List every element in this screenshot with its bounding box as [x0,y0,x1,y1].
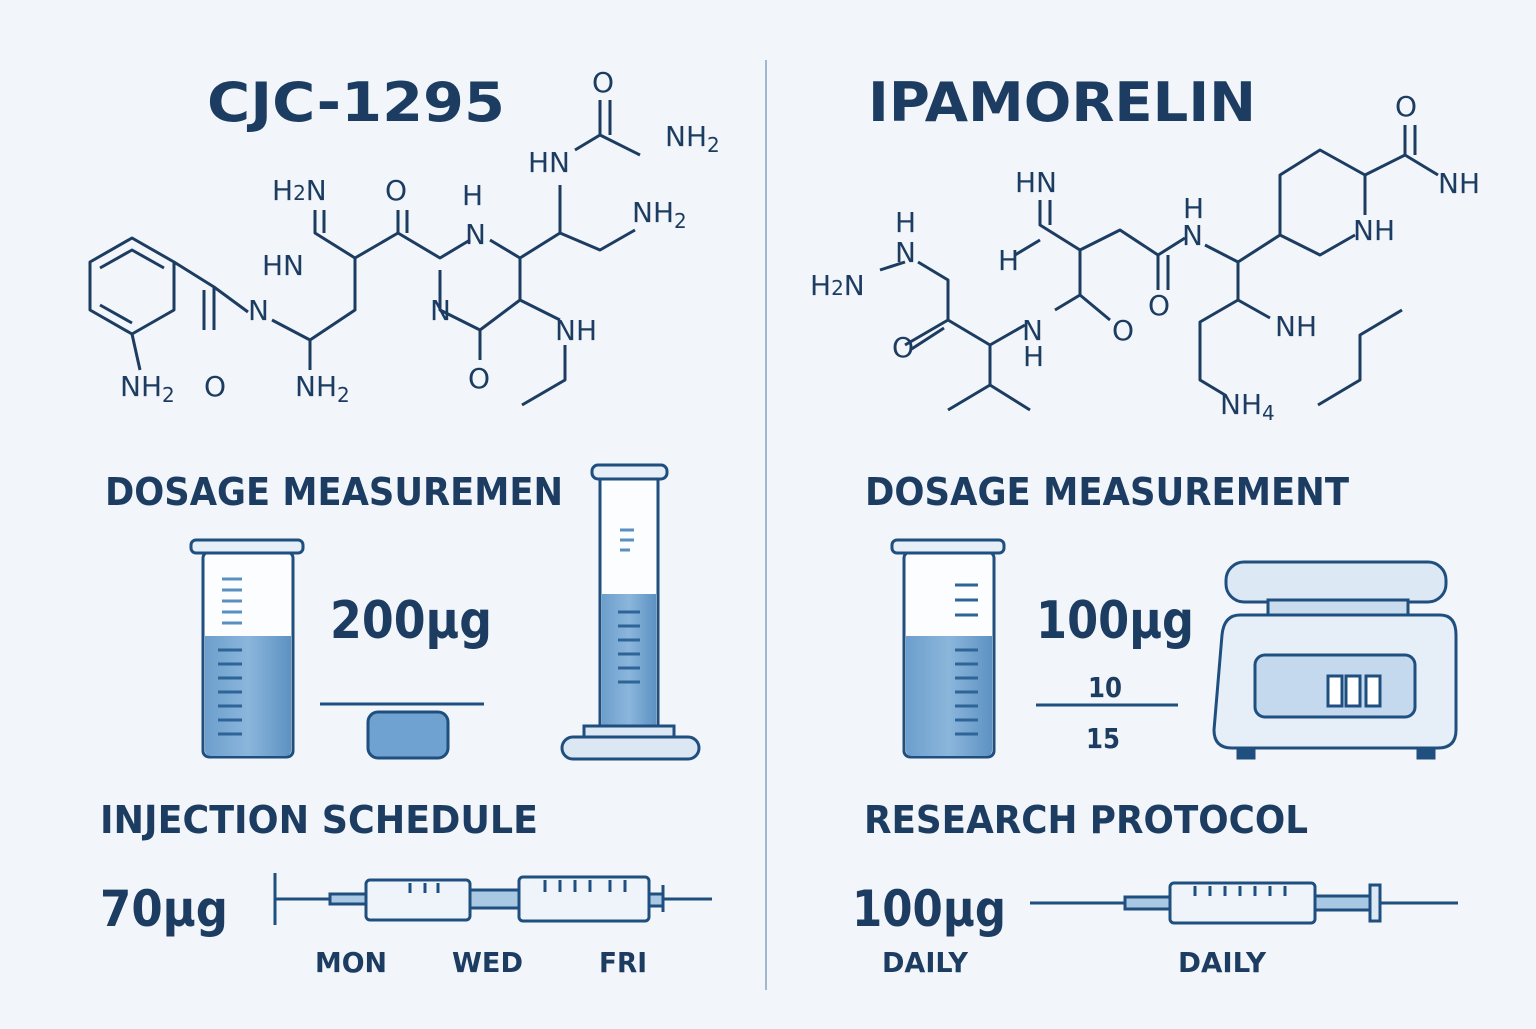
value: 200 µg: 200μg [330,591,492,651]
molecule labels: Ipamorelin: 4 [1262,401,1275,425]
molecule labels: Ipamorelin: NH [1220,388,1262,421]
labels: days [315,946,647,979]
molecule labels: CJC: N [248,294,269,327]
molecule labels: CJC: O [468,362,490,395]
molecule labels: Ipamorelin: H [895,206,916,239]
value: 100 µg: 100μg [1036,591,1194,651]
molecule labels: Ipamorelin: NH [1353,214,1395,247]
molecule labels: Ipamorelin: HN [1015,166,1057,199]
molecule labels: Ipamorelin: H [1183,192,1204,225]
heading: dosage measurement Ipamorelin: DOSAGE MEASUREMENT [865,470,1349,514]
molecule labels: CJC: O [204,370,226,403]
molecule labels: Ipamorelin: O [1148,289,1170,322]
molecule labels: CJC: H [462,179,483,212]
molecule labels: Ipamorelin: N [1022,314,1043,347]
molecule labels: CJC: NH [295,370,337,403]
value: 100 µg daily: 100μg [852,880,1006,938]
molecule labels: CJC: 2 [707,133,720,157]
molecule labels: CJC: O [592,66,614,99]
labels: daily: DAILY [882,946,969,979]
labels: daily: DAILY [1178,946,1267,979]
icon: syringe CJC [275,873,712,925]
value: 70 µg: 70μg [100,880,228,938]
heading: injection schedule: INJECTION SCHEDULE [100,798,538,842]
title: IPAMORELIN: IPAMORELIN [868,71,1256,134]
heading: dosage measurement CJC: DOSAGE MEASUREMEN [105,470,563,514]
icon: beaker right [892,540,1004,757]
molecule labels: Ipamorelin: O [892,331,914,364]
molecule labels: CJC: HN [528,146,570,179]
molecule labels: CJC: NH [665,120,707,153]
molecule labels: CJC: NH [555,314,597,347]
molecule labels: CJC: HN [262,249,304,282]
molecule labels: CJC: N [465,218,486,251]
icon: graduated cylinder [562,465,699,759]
fraction 10/15 [1036,671,1178,755]
molecule labels: CJC: NH [120,370,162,403]
fraction 10/15: 15 [1086,722,1120,755]
title: CJC-1295: CJC-1295 [207,71,505,134]
molecule labels: Ipamorelin: N [1182,219,1203,252]
molecule labels: CJC: 2 [674,209,687,233]
fraction 10/15: 10 [1088,671,1122,704]
molecule labels: Ipamorelin [810,90,1480,425]
molecule labels: Ipamorelin: NH [1438,167,1480,200]
molecule labels: CJC: NH [632,196,674,229]
icon: beaker left [191,540,303,757]
icon: scale [1214,562,1456,758]
labels: days: FRI [599,946,647,979]
molecule labels: CJC: O [385,174,407,207]
molecule labels: CJC: N [430,294,451,327]
labels: daily [882,946,1267,979]
molecule: Ipamorelin [880,125,1438,410]
molecule labels: Ipamorelin: N [895,236,916,269]
molecule labels: Ipamorelin: O [1395,90,1417,123]
molecule labels: Ipamorelin: O [1112,314,1134,347]
icon: syringe Ipamorelin [1030,883,1458,923]
molecule: CJC-1295 [90,100,640,405]
molecule labels: CJC: 2 [337,383,350,407]
molecule labels: Ipamorelin: H [998,244,1019,277]
molecule labels: CJC: H2N [272,174,327,207]
labels: days: MON [315,946,387,979]
heading: research protocol: RESEARCH PROTOCOL [864,798,1308,842]
icon: weighing tray [320,704,484,758]
labels: days: WED [452,946,523,979]
molecule labels: Ipamorelin: NH [1275,310,1317,343]
molecule labels: Ipamorelin: H [1023,340,1044,373]
molecule labels: CJC: 2 [162,383,175,407]
molecule labels: CJC [120,66,720,407]
molecule labels: Ipamorelin: H2N [810,269,865,302]
